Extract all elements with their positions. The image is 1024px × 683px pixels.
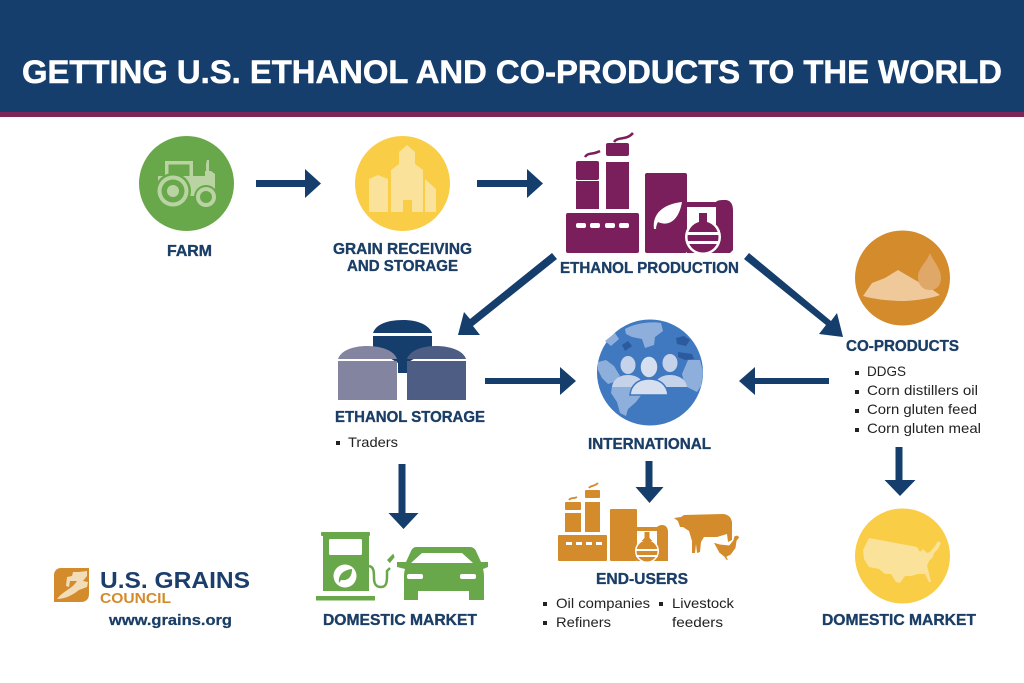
list: co-products: Corn gluten meal [867, 420, 981, 436]
icon: ethanol production factory [566, 133, 733, 255]
arrow: co-products to domestic market [884, 447, 916, 496]
icon: globe with people [597, 320, 703, 426]
logo: U.S. Grains Council [54, 567, 250, 629]
list: end-users: feeders [672, 614, 723, 630]
label: grain receiving and storage [333, 241, 472, 275]
list: co-products: Corn distillers oil [867, 382, 978, 398]
label: co-products: CO-PRODUCTS [846, 338, 959, 355]
icon: co-products pile and oil drop [855, 230, 950, 326]
list: traders: Traders [348, 434, 398, 450]
icon: hen [713, 535, 740, 561]
icon: cow [674, 514, 732, 553]
icon: end-user factory and livestock [558, 483, 740, 563]
label: domestic market (map): DOMESTIC MARKET [822, 612, 976, 629]
logo: U.S. Grains Council: U.S. GRAINS [100, 567, 250, 593]
label: end-users: END-USERS [596, 571, 688, 588]
label: grain receiving and storage: AND STORAGE [347, 258, 458, 275]
arrow: storage to international [485, 367, 576, 395]
list: co-products [855, 363, 981, 436]
label: ethanol production: ETHANOL PRODUCTION [560, 260, 739, 277]
list: co-products: DDGS [867, 363, 906, 379]
label: domestic market (fuel): DOMESTIC MARKET [323, 612, 477, 629]
icon: domestic market US map [855, 508, 950, 604]
list: end-users: Refiners [556, 614, 611, 630]
icon: farm tractor [139, 136, 234, 231]
label: international: INTERNATIONAL [588, 436, 711, 453]
list: end-users: Oil companies [556, 595, 650, 611]
arrow: production to co-products [744, 253, 843, 337]
arrow: co-products to international [739, 367, 829, 395]
list: co-products: Corn gluten feed [867, 401, 977, 417]
arrow: storage to domestic market [388, 464, 418, 529]
label: farm: FARM [167, 243, 212, 260]
icon: logo leaf [54, 568, 89, 602]
list: end-users [543, 595, 735, 630]
icon: ethanol storage tanks [338, 320, 466, 400]
arrow: farm to grain [256, 169, 321, 198]
arrow: production to ethanol storage [458, 253, 557, 335]
header banner [0, 0, 1024, 117]
logo: U.S. Grains Council: www.grains.org [108, 612, 232, 629]
logo: U.S. Grains Council: COUNCIL [100, 591, 171, 607]
arrow: grain to ethanol production [477, 169, 543, 198]
label: grain receiving and storage: GRAIN RECEIVING [333, 241, 472, 258]
label: ethanol storage: ETHANOL STORAGE [335, 409, 485, 426]
icon: grain elevator [355, 136, 450, 231]
arrow: international to end-users [636, 461, 664, 503]
list: end-users: Livestock [672, 595, 735, 611]
icon: fuel pump and car [316, 532, 488, 600]
